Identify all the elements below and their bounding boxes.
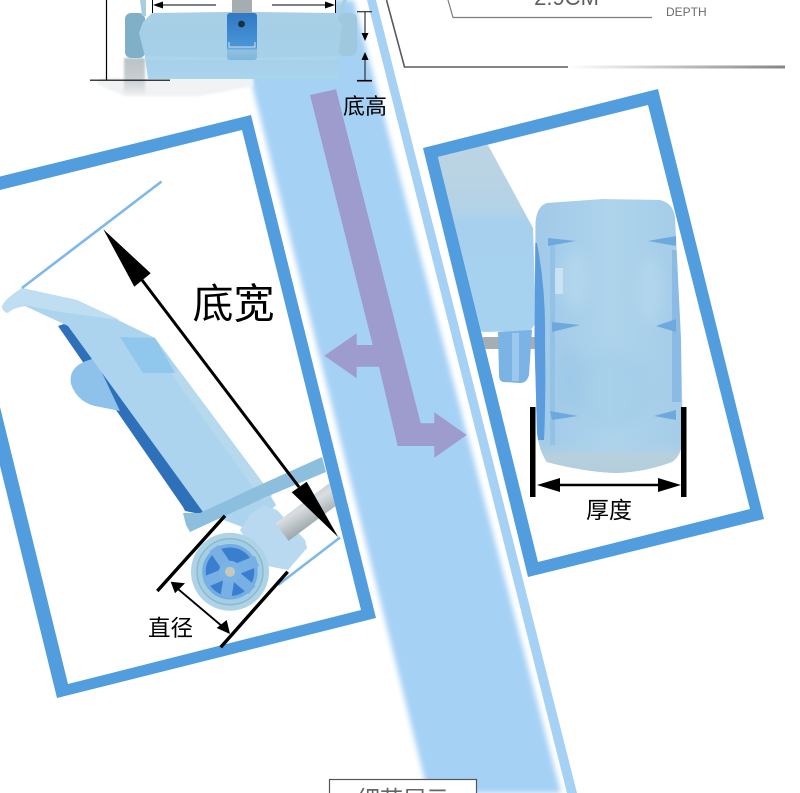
left panel frame [0, 115, 376, 698]
tyre left rim [534, 243, 546, 440]
straps [140, 0, 146, 16]
handle top highlight [2, 288, 120, 320]
top product photo: base [96, 0, 357, 96]
axle [483, 337, 539, 349]
tyre mottling [570, 350, 650, 430]
pole [282, 489, 340, 532]
pole [232, 0, 252, 14]
arrow: thickness [537, 478, 681, 492]
left panel interior [0, 130, 361, 684]
thin blue diagonal stripe [367, 0, 577, 793]
tread notches [548, 238, 576, 246]
depth label: DEPTH [666, 5, 707, 19]
tyre [534, 199, 682, 473]
strap [183, 457, 326, 532]
knob [71, 358, 120, 411]
right wheel [338, 13, 357, 56]
wide blue diagonal band [231, 0, 561, 793]
arrow: base width [103, 229, 338, 537]
label: base height: 底高 [343, 94, 387, 119]
dark underside [58, 322, 210, 516]
handle opening [120, 337, 175, 373]
label: diameter: 直径 [148, 616, 193, 641]
section heading box: detail display [330, 780, 476, 793]
left wheel [125, 13, 145, 58]
label: thickness: 厚度 [586, 497, 632, 523]
floor shadow [96, 78, 253, 96]
slot [227, 13, 257, 60]
arrow: diameter [171, 582, 230, 634]
base body [139, 12, 342, 79]
handle ridge [170, 370, 272, 500]
top right spec frame [386, 0, 785, 68]
handle body [2, 288, 276, 530]
tyre right rim [672, 250, 681, 402]
width guide lines [22, 182, 340, 585]
bracket [240, 505, 307, 570]
label: base width: 底宽 [192, 281, 274, 327]
purple double arrow [310, 89, 467, 458]
clip [498, 330, 532, 383]
tyre inner band [550, 245, 555, 445]
diameter guide lines [157, 516, 288, 647]
right panel interior [438, 105, 750, 562]
right panel photo: wheel side view [430, 145, 690, 480]
left panel photo: base side view [2, 288, 340, 611]
top dimension lines [90, 0, 372, 81]
base block [430, 145, 536, 332]
right panel frame [423, 89, 764, 577]
thickness guide lines [530, 407, 686, 497]
white photo background [153, 0, 335, 13]
wheel [191, 533, 269, 611]
